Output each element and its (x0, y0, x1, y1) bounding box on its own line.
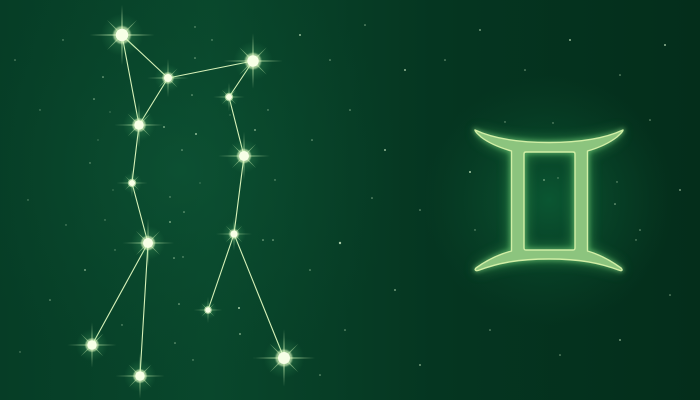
icon: Gemini zodiac symbol (475, 130, 623, 271)
constellation lines (92, 35, 284, 376)
constellation stars (67, 5, 315, 399)
